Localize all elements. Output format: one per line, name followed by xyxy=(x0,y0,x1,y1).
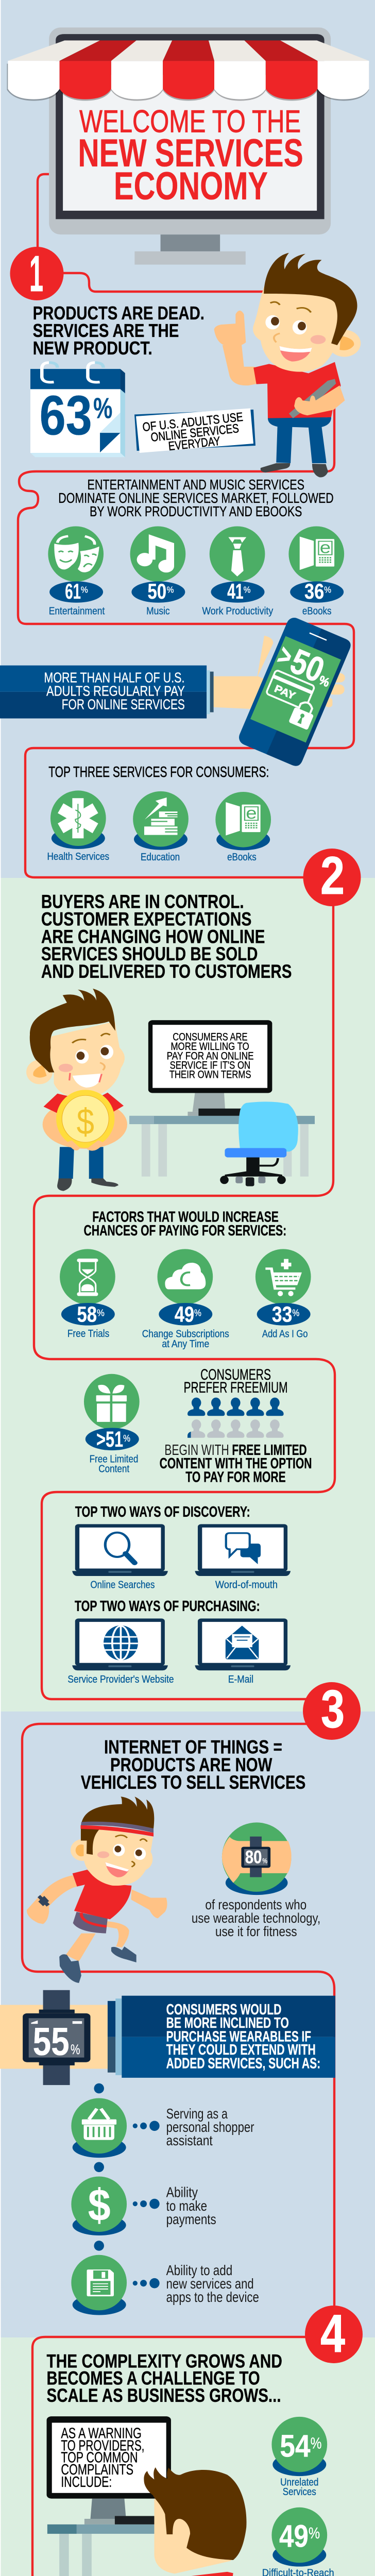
icon: desk with monitor warning xyxy=(47,2416,171,2576)
icon: striped awning xyxy=(7,41,369,101)
icon: monitor message xyxy=(148,1020,272,1093)
text: more than half: MORE THAN HALF OF U.S. xyxy=(44,669,184,686)
stat: ebooks 36% xyxy=(288,526,344,617)
stat: unrelated services 54% xyxy=(271,2417,327,2497)
icon: word of mouth laptop: Word-of-mouth xyxy=(215,1579,278,1590)
stat: music 50%: Music xyxy=(146,605,170,617)
stat: free limited content >51% xyxy=(84,1374,140,1475)
icon: calendar 63% xyxy=(30,363,125,457)
hero: storefront monitor with title xyxy=(7,27,369,265)
heading: SERVICES ARE THE xyxy=(33,320,179,341)
badge: number 2: 2 xyxy=(320,846,345,906)
stat: 80% wearables for fitness: 80 xyxy=(245,1846,262,1867)
badge: number 4: 4 xyxy=(320,2304,345,2364)
icon: ebooks: e xyxy=(246,803,257,822)
heading: entertainment and music xyxy=(58,477,334,519)
icon: education: Education xyxy=(141,851,180,862)
icon: smartphone >50% xyxy=(236,615,353,768)
stat: work productivity 41%: 41 xyxy=(227,580,244,603)
icon: education xyxy=(133,791,189,862)
stat: entertainment 61% xyxy=(48,526,105,617)
heading xyxy=(41,891,292,982)
icon: wrist and smartwatch 55%: % xyxy=(71,2042,80,2057)
text: begin with free limited content: FREE LIMITED xyxy=(232,1442,307,1459)
item: make payments: to make xyxy=(166,2198,207,2214)
item: add apps: Ability to add xyxy=(166,2262,232,2278)
item: personal shopper xyxy=(71,2083,254,2158)
stat: free limited content >51%: >51 xyxy=(96,1427,123,1451)
stat: difficult-to-reach live support 49%: 49 xyxy=(279,2519,309,2554)
text: more than half xyxy=(44,669,185,713)
stat: ebooks 36%: eBooks xyxy=(302,605,332,617)
callout: 63% caption: EVERYDAY xyxy=(168,434,221,453)
text: begin with free limited content: TO PAY FOR MORE xyxy=(185,1469,286,1486)
item: make payments: Ability xyxy=(166,2184,198,2200)
icon: smartphone >50%: 50 xyxy=(285,641,330,690)
icon: man holding coin xyxy=(26,989,127,1191)
heading xyxy=(47,2351,282,2406)
icon: smartphone >50%: PAY xyxy=(272,683,297,702)
stat: free trials 58%: % xyxy=(97,1307,105,1318)
badge: number 1 xyxy=(10,245,64,302)
panel: more than half pay xyxy=(0,636,345,862)
stat: ebooks 36%: e xyxy=(320,538,331,556)
stat: music 50% xyxy=(130,526,185,617)
heading: consumers prefer freemium xyxy=(184,1366,288,1396)
panel: consumers would purchase wearables xyxy=(108,1996,335,2078)
icon: running man xyxy=(27,1797,167,1983)
item: personal shopper: assistant xyxy=(166,2132,213,2148)
stat: work productivity 41% xyxy=(202,526,274,617)
stat: entertainment 61%: Entertainment xyxy=(49,605,105,617)
heading: consumers prefer freemium: PREFER FREEMIUM xyxy=(184,1379,288,1396)
stat: music 50%: % xyxy=(167,585,174,595)
stat: difficult-to-reach live support 49%: % xyxy=(309,2524,320,2542)
icon: smartphone >50%: % xyxy=(317,673,332,690)
list: added services xyxy=(71,2083,259,2315)
icon: wrist and smartwatch 55% xyxy=(0,1990,108,2085)
section 4: complexity grows xyxy=(47,2351,338,2576)
icon: man holding coin: $ xyxy=(77,1101,94,1142)
item: add apps: new services and xyxy=(166,2276,254,2292)
icon: monitor xyxy=(49,27,331,265)
stat: work productivity 41%: % xyxy=(244,585,251,595)
stat: ebooks 36%: 36 xyxy=(304,580,324,603)
text: begin with free limited content xyxy=(160,1442,312,1486)
stat: add as I go 33%: Add As I Go xyxy=(262,1328,308,1340)
stat: free trials 58% xyxy=(60,1249,115,1339)
item: make payments: $ xyxy=(88,2180,111,2230)
heading: PRODUCTS ARE NOW xyxy=(110,1755,272,1776)
icon: monitor message: CONSUMERS ARE xyxy=(173,1031,248,1043)
icon: email laptop xyxy=(195,1619,291,1685)
icon: people 51 of 100 xyxy=(187,1398,284,1438)
icon: calendar 63%: 63 xyxy=(40,385,92,447)
stat: 80% wearables for fitness: of respondents who xyxy=(205,1897,306,1912)
icon: monitor message: PAY FOR AN ONLINE xyxy=(167,1050,254,1062)
icon: desk with monitor warning: TO PROVIDERS, xyxy=(61,2437,144,2453)
item: make payments xyxy=(71,2162,216,2235)
text: more than half: FOR ONLINE SERVICES xyxy=(62,696,185,713)
heading: PRODUCTS ARE DEAD. xyxy=(33,302,204,324)
callout: 63% caption: OF U.S. ADULTS USE xyxy=(142,410,244,434)
icon: smiling man pointing xyxy=(214,253,361,477)
heading: discovery: TOP TWO WAYS OF DISCOVERY: xyxy=(75,1504,250,1520)
heading: consumers prefer freemium: CONSUMERS xyxy=(200,1366,271,1383)
heading xyxy=(33,302,204,359)
icon: health services: Health Services xyxy=(47,851,109,862)
stat: change subscriptions 49%: % xyxy=(194,1307,201,1318)
stat: 80% wearables for fitness: % xyxy=(262,1857,267,1865)
stat: 80% wearables for fitness xyxy=(192,1822,320,1939)
icon: calendar 63%: % xyxy=(93,392,112,425)
stat: unrelated services 54%: Unrelated xyxy=(280,2476,318,2488)
stat: add as I go 33% xyxy=(255,1249,311,1340)
stat: change subscriptions 49%: 49 xyxy=(175,1302,194,1327)
icon: desk with monitor warning: COMPLAINTS xyxy=(61,2462,133,2478)
icon: desk with monitor warning: AS A WARNING xyxy=(61,2425,142,2442)
panel: consumers would purchase wearables: CONSUMERS WOULD xyxy=(166,2002,281,2018)
icon: desk with monitor warning: INCLUDE: xyxy=(61,2474,112,2490)
icon: ebooks xyxy=(215,792,271,862)
heading: BUYERS ARE IN CONTROL. xyxy=(41,891,244,912)
stat: unrelated services 54%: % xyxy=(311,2435,321,2452)
heading: CUSTOMER EXPECTATIONS xyxy=(41,909,251,930)
stat: entertainment 61%: % xyxy=(81,585,88,595)
stat: work productivity 41%: Work Productivity xyxy=(202,605,274,617)
stat: difficult-to-reach live support 49% xyxy=(262,2507,334,2576)
stat: add as I go 33%: % xyxy=(292,1307,299,1318)
section 1: products are dead xyxy=(30,253,361,617)
icon: website laptop: Service Provider's Website xyxy=(67,1673,174,1685)
heading: factors xyxy=(84,1209,286,1239)
panel: factors and freemium xyxy=(60,1209,312,1486)
text: more than half: ADULTS REGULARLY PAY xyxy=(46,683,185,699)
stat: change subscriptions 49%: Change Subscriptions xyxy=(142,1328,229,1340)
icon: monitor message: SERVICE IF IT'S ON xyxy=(170,1059,250,1072)
icon: wrist and smartwatch 55%: 55 xyxy=(33,2020,70,2063)
icon: monitor message: THEIR OWN TERMS xyxy=(169,1069,251,1081)
icon: sleeve and hand xyxy=(0,636,345,718)
item: add apps xyxy=(71,2241,259,2315)
stat: change subscriptions 49%: at Any Time xyxy=(162,1337,209,1349)
icon: health services xyxy=(47,790,109,862)
icon: website laptop xyxy=(67,1619,174,1685)
stat: unrelated services 54%: 54 xyxy=(280,2428,311,2463)
icon: word of mouth laptop xyxy=(195,1524,291,1590)
item: add apps: apps to the device xyxy=(166,2289,259,2305)
section 2: buyers in control xyxy=(26,891,315,1191)
title: ECONOMY xyxy=(114,164,268,208)
stat: music 50%: 50 xyxy=(147,580,166,603)
item: personal shopper: Serving as a xyxy=(166,2105,228,2122)
item: personal shopper: personal shopper xyxy=(166,2119,254,2135)
stat: 80% wearables for fitness: use it for fitness xyxy=(215,1924,297,1939)
stat: add as I go 33%: 33 xyxy=(272,1302,292,1327)
title xyxy=(78,104,303,208)
icon: email laptop: E-Mail xyxy=(228,1673,253,1685)
stat: free limited content >51%: Free Limited xyxy=(90,1453,138,1465)
badge: number 3: 3 xyxy=(321,1680,345,1739)
heading xyxy=(81,1737,305,1793)
stat: entertainment 61%: 61 xyxy=(65,580,81,603)
icon: desk with monitor warning: TOP COMMON xyxy=(61,2449,138,2466)
stat: free trials 58%: 58 xyxy=(77,1302,97,1327)
item: make payments: payments xyxy=(166,2211,216,2227)
icon: man from behind in chair xyxy=(111,2467,247,2576)
icon: desk and chair xyxy=(129,1093,315,1187)
icon: online searches laptop: Online Searches xyxy=(91,1579,155,1590)
callout: 63% caption: ONLINE SERVICES xyxy=(150,421,240,445)
icon: online searches laptop xyxy=(72,1524,168,1590)
stat: ebooks 36%: % xyxy=(324,585,331,595)
stat: free limited content >51%: % xyxy=(123,1433,130,1444)
stat: unrelated services 54%: Services xyxy=(283,2486,316,2497)
icon: smartphone >50%: > xyxy=(273,638,297,674)
icon: ebooks: eBooks xyxy=(227,851,257,862)
callout: 63% caption xyxy=(134,408,255,453)
section 3: internet of things xyxy=(0,1737,335,2085)
badge: number 3 xyxy=(303,1680,361,1740)
stat: free limited content >51%: Content xyxy=(98,1463,130,1475)
stat: free trials 58%: Free Trials xyxy=(67,1327,109,1339)
text: begin with free limited content: BEGIN WITH xyxy=(164,1442,229,1459)
badge: number 4 xyxy=(305,2304,363,2364)
icon: monitor message: MORE WILLING TO xyxy=(171,1041,249,1053)
heading: NEW PRODUCT. xyxy=(33,337,152,359)
panel: discovery and purchasing xyxy=(67,1504,291,1685)
badge: number 2 xyxy=(303,846,361,906)
badge: number 1: 1 xyxy=(29,245,43,302)
stat: change subscriptions 49% xyxy=(142,1249,229,1349)
